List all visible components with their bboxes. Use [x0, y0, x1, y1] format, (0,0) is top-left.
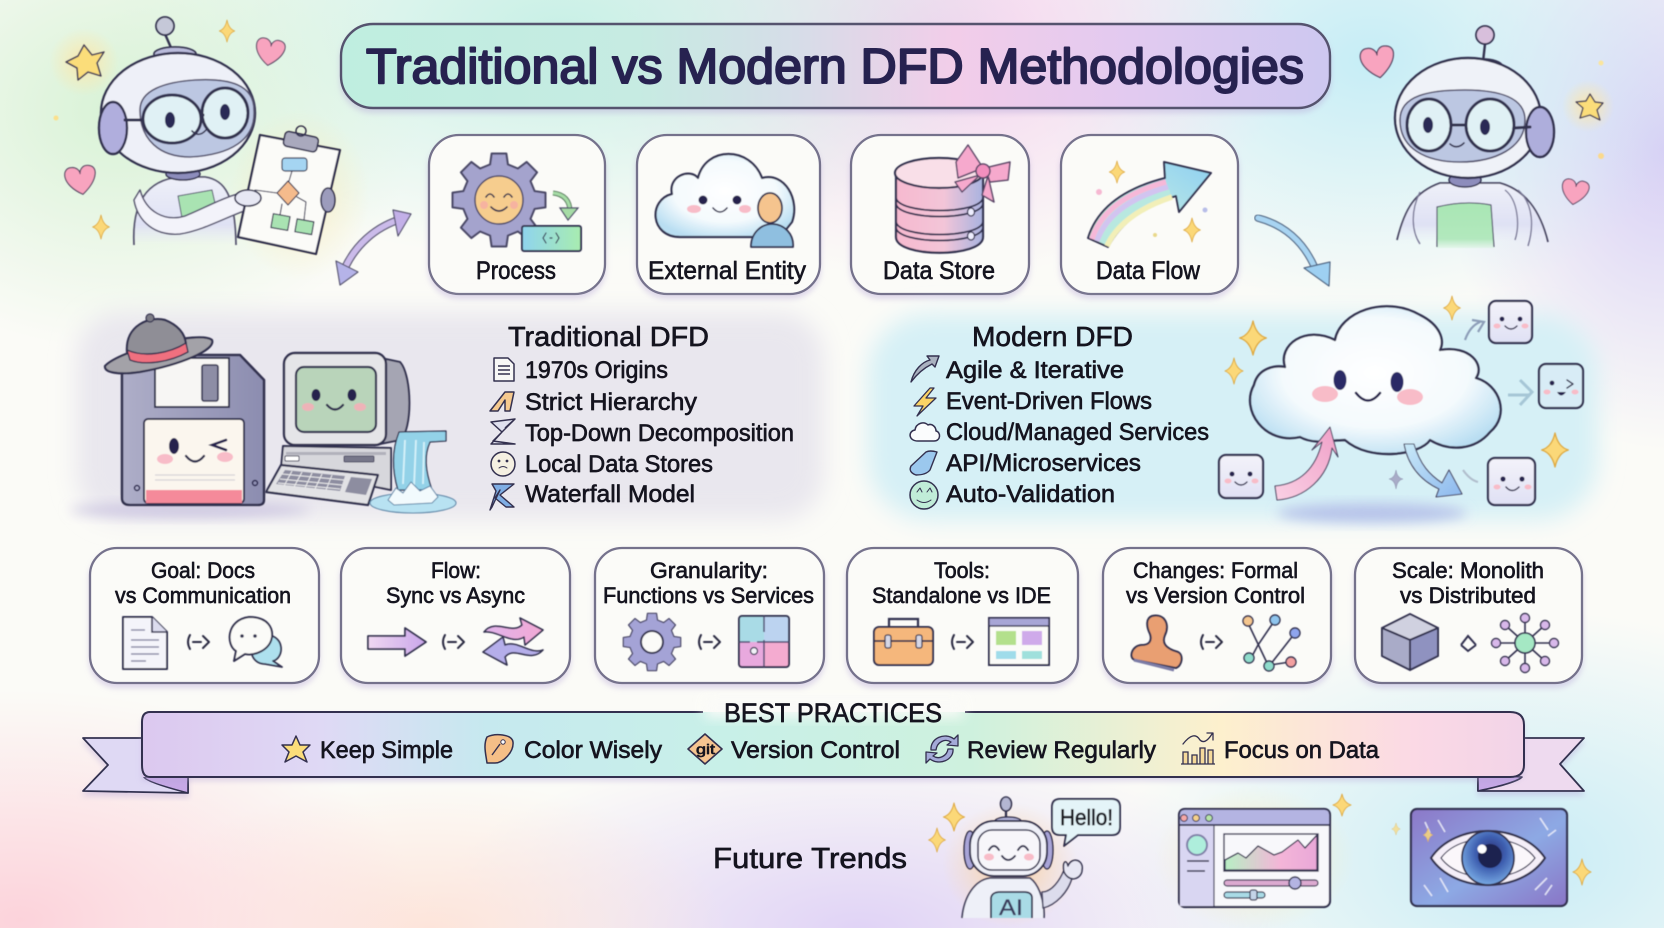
item: Version Control	[688, 734, 900, 764]
cloud	[1250, 306, 1501, 454]
robot body	[134, 177, 236, 245]
robot with clipboard	[49, 17, 370, 280]
card text: Changes: Formal	[1133, 558, 1298, 583]
antenna	[165, 34, 172, 50]
item: Keep Simple: Keep Simple	[320, 737, 453, 764]
hands	[235, 190, 261, 206]
label: External Entity: External Entity	[648, 257, 806, 285]
icons: gear and puzzle	[623, 613, 789, 671]
head	[101, 53, 255, 173]
panel: modern background	[868, 314, 1598, 520]
card: External Entity	[637, 135, 820, 294]
icons: stamp and git graph	[1131, 615, 1300, 671]
title text: Traditional vs Modern DFD Methodologies	[366, 40, 1304, 94]
panel: traditional background	[76, 312, 824, 520]
comparison card: Scale	[1355, 548, 1582, 683]
card text: Sync vs Async	[386, 583, 525, 608]
illustration: happy cloud with data cubes	[1219, 296, 1583, 523]
waving arm	[1042, 870, 1072, 908]
item: Local Data Stores: Local Data Stores	[525, 451, 713, 478]
ribbon tails	[83, 738, 1584, 793]
card text: Goal: Docs	[151, 558, 255, 583]
item: 1970s Origins: 1970s Origins	[525, 357, 668, 384]
illustration: floppy disk with hat	[70, 314, 310, 518]
item: Strict Hierarchy: Strict Hierarchy	[525, 389, 697, 416]
clipboard with flowchart	[238, 126, 340, 254]
robot body	[1397, 183, 1548, 242]
card text: Functions vs Services	[603, 583, 814, 608]
speech bubble	[1052, 799, 1120, 846]
label: Data Flow: Data Flow	[1096, 257, 1201, 285]
card: Data Flow	[1061, 135, 1238, 294]
item: Cloud/Managed Services: Cloud/Managed Services	[946, 419, 1209, 446]
label: Process: Process	[476, 257, 556, 285]
illustration: AR eye panel	[1392, 809, 1591, 906]
icons: document and chat	[123, 617, 282, 669]
item: Agile & Iterative: Agile & Iterative	[946, 357, 1124, 384]
item: Focus on Data	[1181, 733, 1380, 764]
keyboard	[266, 465, 378, 505]
illustration: AI robot saying hello	[929, 797, 1120, 927]
item: Top-Down Decomposition: Top-Down Decomposition	[525, 420, 794, 447]
chest label: AI	[999, 895, 1023, 920]
section: Traditional DFD	[490, 321, 794, 510]
small arrows	[1465, 320, 1484, 340]
glasses	[125, 88, 248, 143]
icons: cube and hub network	[1382, 614, 1558, 672]
illustration: dashboard window	[1155, 786, 1355, 928]
section: Modern DFD	[910, 321, 1209, 509]
head	[1395, 58, 1541, 178]
hat	[105, 314, 212, 373]
arrow: into cloud	[1275, 427, 1338, 500]
card text: Flow:	[431, 558, 481, 583]
base unit	[281, 446, 391, 490]
comparison card: Goal	[90, 548, 319, 683]
comparison card: Tools	[847, 548, 1078, 683]
item: Version Control: Version Control	[731, 737, 900, 764]
ribbon band	[142, 712, 1524, 777]
antenna	[1483, 44, 1485, 62]
heading: Traditional DFD	[508, 321, 709, 352]
heading: Modern DFD	[972, 321, 1133, 352]
card text	[386, 558, 525, 608]
robot body	[962, 878, 1044, 918]
icon: rainbow arrow	[1088, 161, 1211, 247]
card text	[1392, 558, 1544, 608]
decorations right	[1359, 45, 1614, 207]
cube: left	[1219, 455, 1263, 498]
arrow: blue curved arrow	[1258, 218, 1330, 286]
cube: bottom right	[1488, 458, 1535, 505]
antenna	[1005, 812, 1007, 822]
illustration: retro computer with waterfall	[266, 353, 456, 513]
card: Process	[429, 135, 605, 294]
label: Data Store: Data Store	[883, 257, 995, 285]
icons: toolbox and IDE	[874, 618, 1049, 665]
item: Color Wisely: Color Wisely	[524, 737, 662, 764]
comparison card: Changes	[1103, 548, 1331, 683]
icon: database with bow	[895, 145, 1010, 253]
card text: vs Version Control	[1126, 583, 1305, 608]
card text: vs Communication	[115, 583, 291, 608]
glasses	[1407, 99, 1530, 151]
cube: top right	[1489, 301, 1532, 343]
card text: Granularity:	[650, 558, 768, 583]
arrow: purple double arrow	[336, 210, 411, 285]
comparison card: Flow	[341, 548, 570, 683]
card text	[603, 558, 814, 608]
card text	[872, 558, 1051, 608]
decorations left	[49, 20, 286, 239]
speech bubble: Hello!	[1060, 805, 1113, 830]
item: API/Microservices: API/Microservices	[946, 450, 1141, 477]
item: Version Control: git	[696, 741, 715, 757]
title banner	[341, 24, 1330, 108]
card text: Standalone vs IDE	[872, 583, 1051, 608]
ribbon heading: BEST PRACTICES	[724, 698, 942, 728]
item: Event-Driven Flows: Event-Driven Flows	[946, 388, 1152, 415]
waterfall	[370, 431, 456, 513]
heading: Future Trends: Future Trends	[713, 843, 907, 875]
item: Waterfall Model: Waterfall Model	[525, 481, 695, 508]
icons: sync and async arrows	[368, 618, 543, 665]
monitor	[372, 356, 409, 445]
sparkles	[1225, 296, 1568, 489]
card text: Tools:	[934, 558, 990, 583]
comparison card: Granularity	[595, 548, 824, 683]
icon: cloud and person	[656, 154, 794, 247]
card text: vs Distributed	[1400, 583, 1536, 608]
head	[964, 831, 976, 869]
item: Focus on Data: Focus on Data	[1224, 737, 1380, 764]
ribbon: best practices	[83, 698, 1584, 793]
item: Auto-Validation: Auto-Validation	[946, 481, 1115, 508]
robot looking forward	[1359, 26, 1614, 248]
cube: right	[1539, 364, 1583, 408]
arrow: out of cloud	[1404, 444, 1462, 497]
card text	[1126, 558, 1305, 608]
item: Review Regularly: Review Regularly	[967, 737, 1156, 764]
icon: gear with smiling face	[453, 154, 581, 251]
card text	[115, 558, 291, 608]
card text: Scale: Monolith	[1392, 558, 1544, 583]
card: Data Store	[851, 135, 1029, 294]
